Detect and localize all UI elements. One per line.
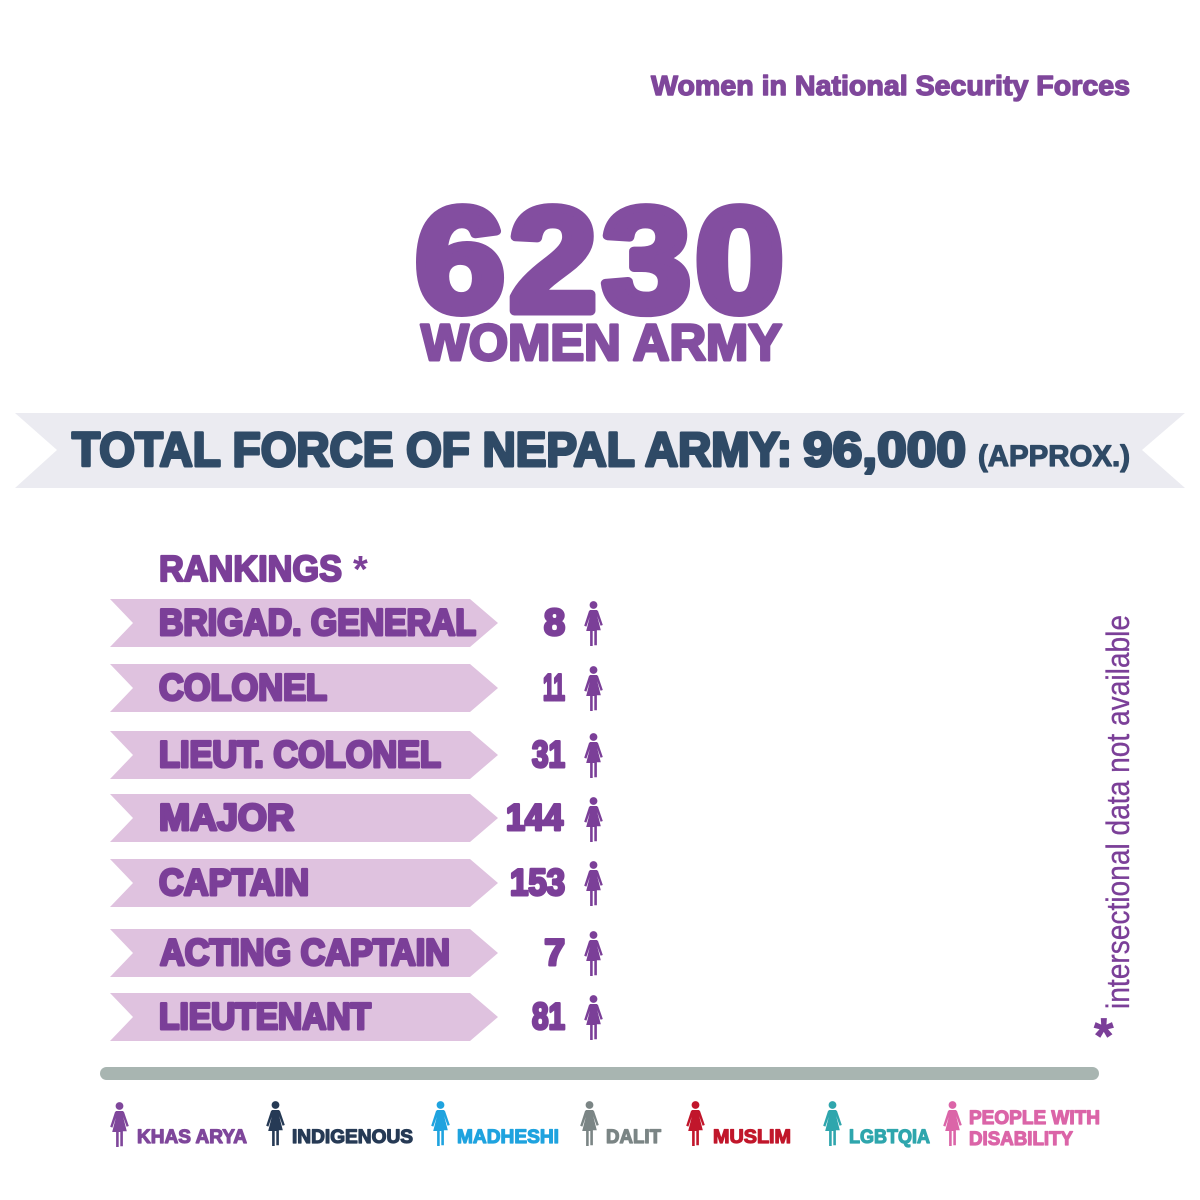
legend: khas arya: KHAS ARYA [137, 1127, 247, 1148]
headline number: 6230: 3 [602, 178, 691, 343]
rank row: major: 144 [506, 797, 563, 838]
legend: madheshi: MADHESHI [457, 1127, 559, 1148]
rank row: lieutenant colonel: LIEUT. COLONEL [159, 734, 441, 775]
rank row: colonel [110, 664, 603, 712]
rank row: captain: CAPTAIN [159, 862, 309, 903]
rank row: lieutenant colonel [110, 731, 603, 779]
side note: intersectional data not available: * [1094, 1008, 1114, 1064]
rank row: major: MAJOR [159, 797, 294, 838]
headline number: 6230 [415, 178, 784, 343]
rank row: colonel: COLONEL [159, 667, 327, 708]
section title: Women in National Security Forces [651, 70, 1130, 101]
rank row: brigadier general [110, 599, 603, 647]
rank row: lieutenant colonel: 31 [532, 734, 565, 775]
legend: madheshi [431, 1101, 559, 1148]
headline number: 6230: 6 [415, 178, 505, 343]
rank row: captain [110, 859, 603, 907]
rankings heading: RANKINGS [159, 548, 342, 589]
legend: khas arya [110, 1102, 247, 1148]
legend: dalit [580, 1101, 661, 1148]
headline label: women army: WOMEN ARMY [421, 314, 782, 371]
rank row: lieutenant: LIEUTENANT [159, 996, 371, 1037]
legend: lgbtqia: LGBTQIA [849, 1127, 930, 1148]
side note: intersectional data not available: intersectional data not available [1100, 615, 1136, 1009]
legend: dalit: DALIT [606, 1127, 661, 1148]
rank row: lieutenant: 81 [532, 996, 565, 1037]
legend divider bar [100, 1067, 1099, 1080]
legend: people with disability [943, 1101, 1100, 1150]
rank row: acting captain: ACTING CAPTAIN [160, 932, 450, 973]
legend: people with disability: PEOPLE WITH [969, 1108, 1100, 1129]
legend: lgbtqia [823, 1101, 930, 1148]
legend: muslim: MUSLIM [713, 1127, 791, 1148]
rank row: acting captain [110, 929, 603, 977]
legend: people with disability: DISABILITY [969, 1129, 1073, 1150]
rank row: brigadier general: 8 [544, 602, 565, 643]
rank row: lieutenant [110, 993, 603, 1041]
side note: intersectional data not available [1094, 615, 1136, 1064]
rank row: major [110, 794, 603, 842]
legend: indigenous [266, 1101, 413, 1148]
rankings heading: * [353, 549, 368, 591]
headline number: 6230: 2 [509, 178, 597, 343]
banner: total force of Nepal Army: (APPROX.) [978, 440, 1130, 473]
legend: muslim [686, 1101, 791, 1148]
rank row: colonel: 11 [543, 667, 565, 708]
legend: indigenous: INDIGENOUS [292, 1127, 413, 1148]
headline number: 6230: 0 [695, 178, 784, 343]
rank row: captain: 153 [510, 862, 565, 903]
rank row: acting captain: 7 [544, 932, 565, 973]
banner: total force of Nepal Army [15, 413, 1185, 488]
rank row: brigadier general: BRIGAD. GENERAL [159, 602, 476, 643]
banner: total force of Nepal Army: TOTAL FORCE OF NEPAL ARMY: [72, 424, 792, 477]
banner: total force of Nepal Army: 96,000 [803, 424, 966, 477]
